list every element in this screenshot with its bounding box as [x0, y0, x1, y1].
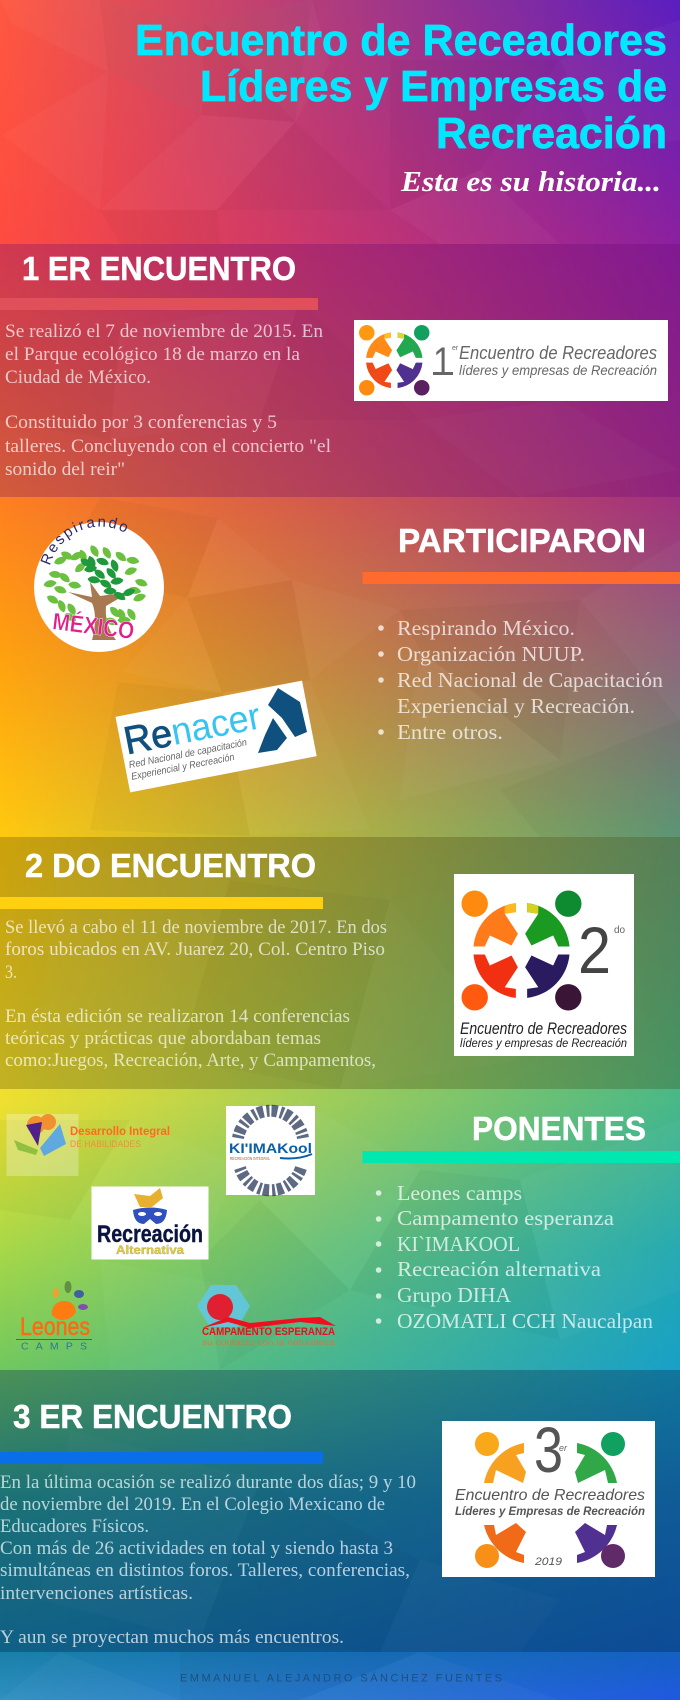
- panel: participaron: [34, 518, 680, 792]
- heading: 2 do encuentro: 2 DO ENCUENTRO: [25, 847, 316, 884]
- logo: respirando méxico: [34, 518, 164, 652]
- logo: renacer: Red Nacional de capacitación: [128, 737, 248, 771]
- panel: 2do encuentro: [0, 847, 634, 1071]
- title: Recreación: [436, 109, 667, 158]
- logo: 1er encuentro de recreadores: 1: [433, 340, 452, 384]
- text block: third encounter description: En la última ocasión se realizó durante dos días; 9 y 10: [0, 1472, 416, 1493]
- heading: participaron: PARTICIPARON: [398, 522, 646, 559]
- text block: second encounter description: [5, 918, 387, 1071]
- panel: 1er encuentro: [0, 250, 668, 480]
- heading: ponentes: PONENTES: [472, 1110, 646, 1147]
- text block: first encounter description: [5, 321, 331, 480]
- accent bar: second encounter: [0, 897, 323, 909]
- logo: renacer: Re: [120, 712, 176, 763]
- list: ponentes: Leones camps: [397, 1181, 522, 1205]
- logo: 3er encuentro de recreadores: 2019: [534, 1556, 562, 1568]
- accent bar: third encounter: [0, 1452, 323, 1464]
- logo: recreación alternativa: [92, 1186, 208, 1260]
- logo: 2do encuentro de recreadores: [454, 874, 634, 1056]
- logo: campamento esperanza: [197, 1285, 336, 1347]
- heading: 1 er encuentro: 1 ER ENCUENTRO: [22, 250, 296, 287]
- band: third encounter: [0, 1370, 680, 1652]
- list: participantes: Respirando México.: [397, 616, 575, 640]
- logo: 2do encuentro de recreadores: líderes y empresas de Recreación: [460, 1036, 627, 1050]
- logo: renacer: Experiencial y Recreación: [130, 752, 236, 783]
- logo: 2do encuentro de recreadores: do: [614, 925, 626, 936]
- logo: leones camps: CAMPS: [21, 1340, 87, 1352]
- logo: 2do encuentro de recreadores: 2: [578, 913, 611, 987]
- logo: 3er encuentro de recreadores: Encuentro de Recreadores: [455, 1487, 645, 1504]
- text block: second encounter description: Se llevó a cabo el 11 de noviembre de 2017. En dos: [5, 918, 387, 938]
- logo: desarrollo integral de habilidades: [6, 1114, 170, 1176]
- text block: second encounter description: En ésta edición se realizaron 14 conferencias: [5, 1007, 350, 1027]
- logo: recreación alternativa: Alternativa: [116, 1243, 184, 1257]
- text block: third encounter description: Con más de 26 actividades en total y siendo hasta 3: [0, 1538, 393, 1559]
- text block: first encounter description: talleres. Concluyendo con el concierto "el: [5, 436, 331, 457]
- list: participantes: [378, 616, 664, 744]
- footer: author credit: EMMANUEL ALEJANDRO SÁNCHEZ FUENTES: [180, 1672, 502, 1684]
- text block: second encounter description: foros ubicados en AV. Juarez 20, Col. Centro Piso: [5, 940, 385, 960]
- logo: recreación alternativa: Recreación: [97, 1221, 203, 1248]
- text block: third encounter description: Y aun se proyectan muchos más encuentros.: [0, 1627, 344, 1648]
- text block: third encounter description: [0, 1472, 416, 1648]
- band: second encounter: [0, 837, 680, 1089]
- text block: second encounter description: 3.: [5, 963, 17, 983]
- list: ponentes: [376, 1181, 654, 1333]
- text block: first encounter description: Constituido por 3 conferencias y 5: [5, 412, 277, 433]
- logo: respirando méxico: Respirando: [40, 518, 128, 565]
- text block: third encounter description: intervenciones artísticas.: [0, 1583, 193, 1604]
- logo: leones camps: Leones: [20, 1313, 90, 1341]
- logo: kiimakool: KI'IMAKool: [229, 1140, 312, 1156]
- text block: first encounter description: Se realizó el 7 de noviembre de 2015. En: [5, 321, 324, 342]
- subtitle: Esta es su historia...: [400, 166, 661, 198]
- logo: 2do encuentro de recreadores: Encuentro de Recreadores: [460, 1020, 627, 1038]
- title: [135, 16, 667, 158]
- title: Líderes y Empresas de: [200, 62, 667, 111]
- logo: campamento esperanza: su contacto con la naturaleza: [202, 1338, 336, 1347]
- logo: 1er encuentro de recreadores: Encuentro de Recreadores: [459, 342, 657, 363]
- list: ponentes: Recreación alternativa: [397, 1257, 602, 1281]
- list: ponentes: OZOMATLI CCH Naucalpan: [397, 1309, 654, 1333]
- logo: leones camps: [16, 1281, 92, 1352]
- heading: 3 er encuentro: 3 ER ENCUENTRO: [13, 1398, 292, 1435]
- text block: first encounter description: el Parque ecológico 18 de marzo en la: [5, 344, 301, 365]
- logo: kiimakool: [226, 1106, 315, 1195]
- text block: first encounter description: sonido del reir": [5, 459, 125, 480]
- text block: first encounter description: Ciudad de México.: [5, 367, 151, 388]
- accent bar: ponentes: [362, 1151, 680, 1163]
- logo: kiimakool: RECREACIÓN INTEGRAL: [230, 1155, 270, 1161]
- list: participantes: Experiencial y Recreación.: [397, 694, 635, 718]
- text block: second encounter description: como:Juegos, Recreación, Arte, y Campamentos,: [5, 1051, 376, 1071]
- text block: second encounter description: teóricas y prácticas que abordaban temas: [5, 1029, 321, 1049]
- text block: third encounter description: simultáneas en distintos foros. Talleres, conferencias,: [0, 1560, 410, 1581]
- logo: campamento esperanza: CAMPAMENTO ESPERANZA: [202, 1326, 335, 1338]
- logo: desarrollo integral de habilidades: Desarrollo Integral: [70, 1124, 170, 1138]
- list: participantes: Red Nacional de Capacitación: [397, 668, 664, 692]
- logo: renacer: nacer: [168, 696, 264, 754]
- logo: 3er encuentro de recreadores: 3: [534, 1414, 563, 1486]
- accent bar: first encounter: [0, 298, 318, 310]
- panel: 3er encuentro: [0, 1398, 655, 1648]
- logo: respirando méxico: MÉXICO: [51, 607, 136, 645]
- logo: 1er encuentro de recreadores: líderes y empresas de Recreación: [459, 362, 657, 378]
- panel: ponentes: [6, 1106, 680, 1352]
- title: Encuentro de Receadores: [135, 16, 667, 65]
- list: ponentes: KI`IMAKOOL: [397, 1232, 520, 1256]
- logo: 3er encuentro de recreadores: [442, 1414, 655, 1577]
- logo: 3er encuentro de recreadores: er: [559, 1443, 568, 1453]
- logo: 1er encuentro de recreadores: er: [452, 345, 459, 352]
- logo: 1er encuentro de recreadores: [354, 320, 668, 401]
- list: ponentes: Campamento esperanza: [397, 1206, 615, 1230]
- band: first encounter: [0, 244, 680, 497]
- logo: 3er encuentro de recreadores: Líderes y Empresas de Recreación: [455, 1504, 645, 1518]
- accent bar: participaron: [362, 572, 680, 584]
- list: ponentes: Grupo DIHA: [397, 1283, 512, 1307]
- logo: desarrollo integral de habilidades: DE HABILIDADES: [70, 1139, 141, 1150]
- logo: renacer: [115, 681, 317, 792]
- list: participantes: Organización NUUP.: [397, 642, 585, 666]
- list: participantes: Entre otros.: [397, 720, 503, 744]
- text block: third encounter description: de noviembre del 2019. En el Colegio Mexicano de: [0, 1494, 385, 1515]
- text block: third encounter description: Educadores Físicos.: [0, 1516, 149, 1537]
